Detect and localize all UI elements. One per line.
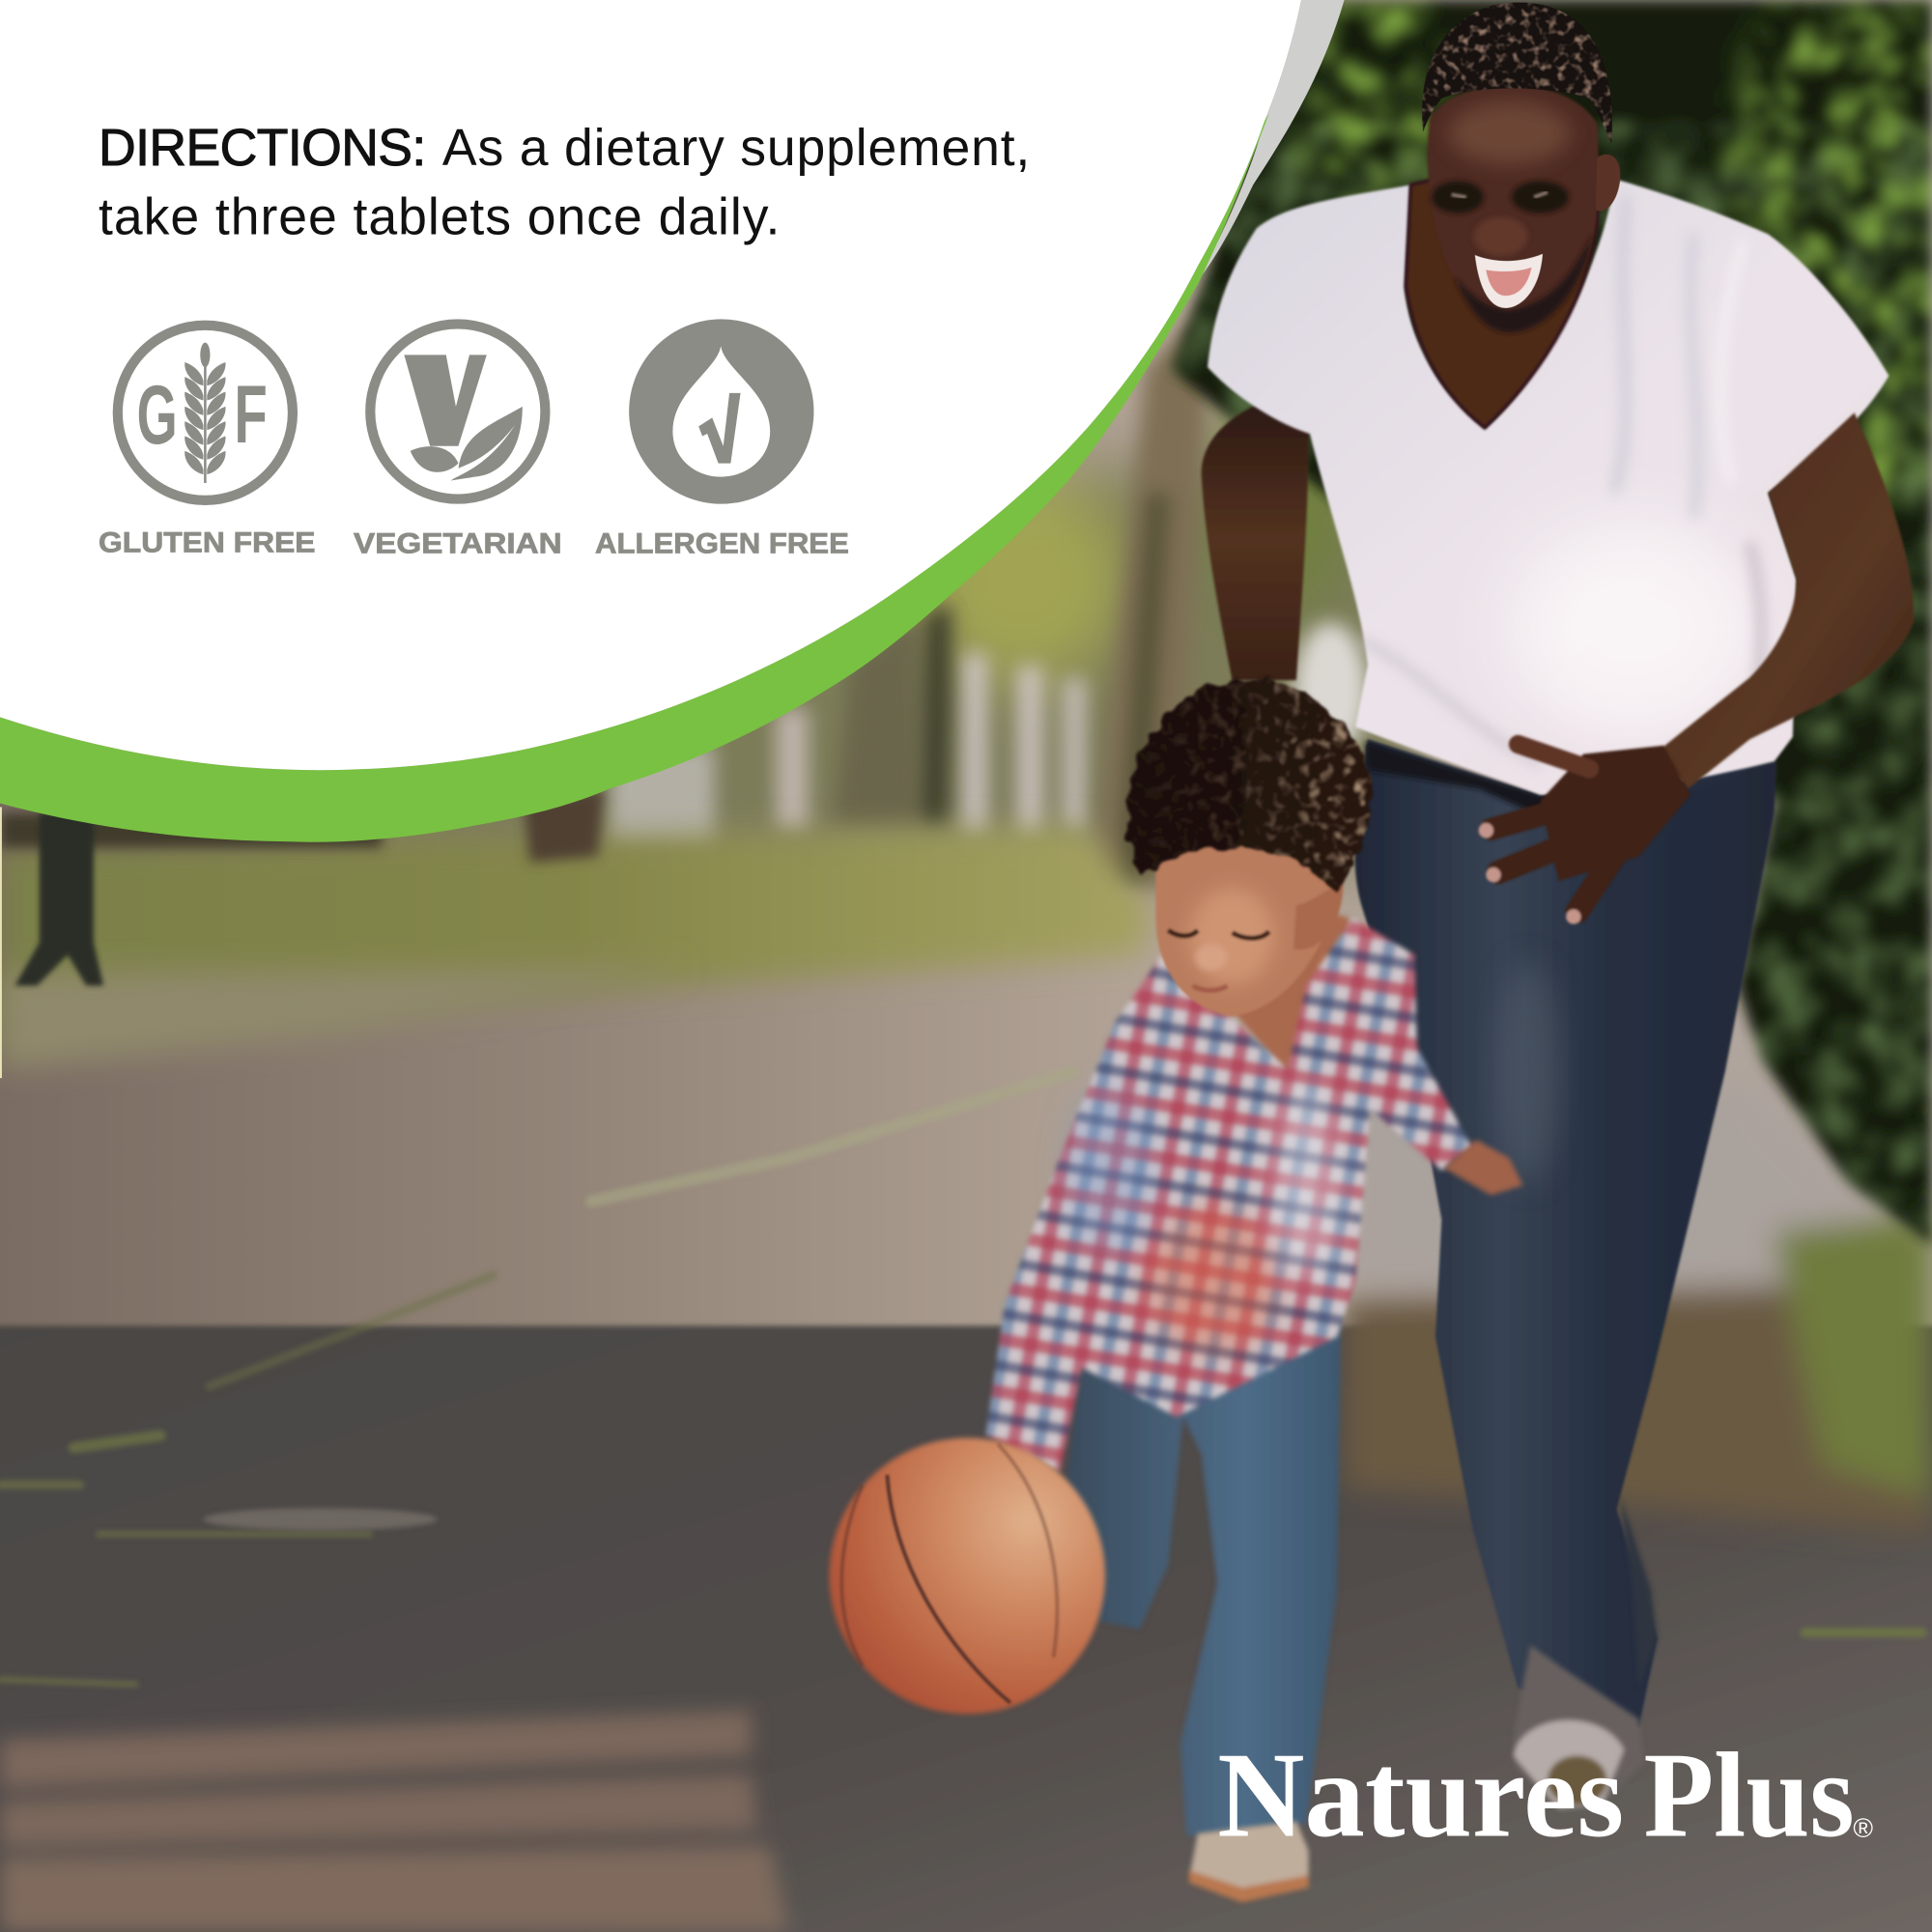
icon: gluten free — [118, 326, 293, 500]
tree trunks — [833, 301, 1213, 887]
child's face — [1155, 834, 1343, 1016]
man's ears — [1596, 155, 1620, 211]
man's head — [1428, 86, 1599, 332]
man's right arm — [1658, 412, 1914, 788]
jeans waistband — [1365, 742, 1602, 838]
child's neck — [1233, 906, 1350, 1074]
white panel — [0, 0, 1301, 770]
dark road shadow — [0, 1325, 1932, 1932]
icon labels: VEGETARIAN — [354, 528, 562, 560]
man's eyes — [1432, 182, 1569, 213]
child's hand — [1444, 1140, 1523, 1195]
green swoosh — [0, 113, 1269, 842]
curved header panel — [0, 0, 1345, 842]
directions text — [99, 120, 1030, 245]
man's nose — [1474, 216, 1528, 256]
forehead highlight — [1448, 101, 1571, 165]
road patch — [203, 1508, 438, 1530]
logo: NaturesPlus: Natures — [1217, 1728, 1624, 1863]
dark hedge line and trunk at swoosh edge — [0, 788, 604, 863]
icon labels: ALLERGEN FREE — [595, 528, 849, 560]
road cracks and weeds — [0, 1072, 1922, 1685]
blurred background trees — [370, 370, 1417, 863]
man's hand — [1479, 744, 1690, 924]
light edge strip on the left — [0, 807, 2, 1078]
directions text: DIRECTIONS: — [99, 120, 426, 177]
logo: NaturesPlus — [1217, 1728, 1873, 1863]
pale gaps between trunks — [610, 622, 1368, 850]
icon: vegetarian — [370, 324, 545, 499]
child's plaid shirt — [985, 918, 1472, 1472]
child's hair — [1122, 674, 1374, 895]
shirt bright patch — [1509, 524, 1756, 733]
icon: gluten free: G — [137, 368, 178, 462]
directions text: take three tablets once daily. — [99, 188, 780, 245]
icon: gluten free: F — [234, 369, 268, 461]
basketball — [829, 1438, 1105, 1714]
plaid colour washes — [1065, 1084, 1341, 1355]
man's T-shirt — [1208, 179, 1889, 795]
icon: allergen free — [629, 319, 813, 504]
man's mouth — [1475, 254, 1543, 308]
man's chest and neck — [1406, 148, 1598, 428]
man's jeans — [1354, 739, 1776, 1727]
beard shadow — [1454, 234, 1593, 332]
right side verge — [1343, 1084, 1932, 1534]
man's left arm — [1202, 397, 1309, 680]
man's shoe — [1513, 1645, 1645, 1808]
icon labels — [99, 526, 849, 560]
child's shoe — [1189, 1821, 1309, 1902]
man's hair — [1422, 2, 1612, 143]
child — [985, 666, 1523, 1902]
wheat ear — [185, 343, 226, 483]
icon labels: GLUTEN FREE — [99, 526, 316, 558]
jeans lower back leg — [1620, 1497, 1658, 1688]
dark green trees upper right — [1158, 0, 1932, 1257]
warm light bands on road — [0, 1710, 788, 1932]
child's trousers — [1067, 1319, 1341, 1836]
lamp post base — [14, 813, 103, 985]
logo: NaturesPlus: Plus — [1644, 1728, 1855, 1863]
grass band — [0, 828, 1152, 1047]
jeans highlight — [1495, 961, 1560, 1182]
grey swoosh — [1198, 0, 1345, 281]
man — [1202, 0, 1914, 1808]
directions text: As a dietary supplement, — [442, 120, 1030, 177]
shirt folds — [1361, 197, 1761, 764]
logo: NaturesPlus: ® — [1853, 1813, 1873, 1843]
